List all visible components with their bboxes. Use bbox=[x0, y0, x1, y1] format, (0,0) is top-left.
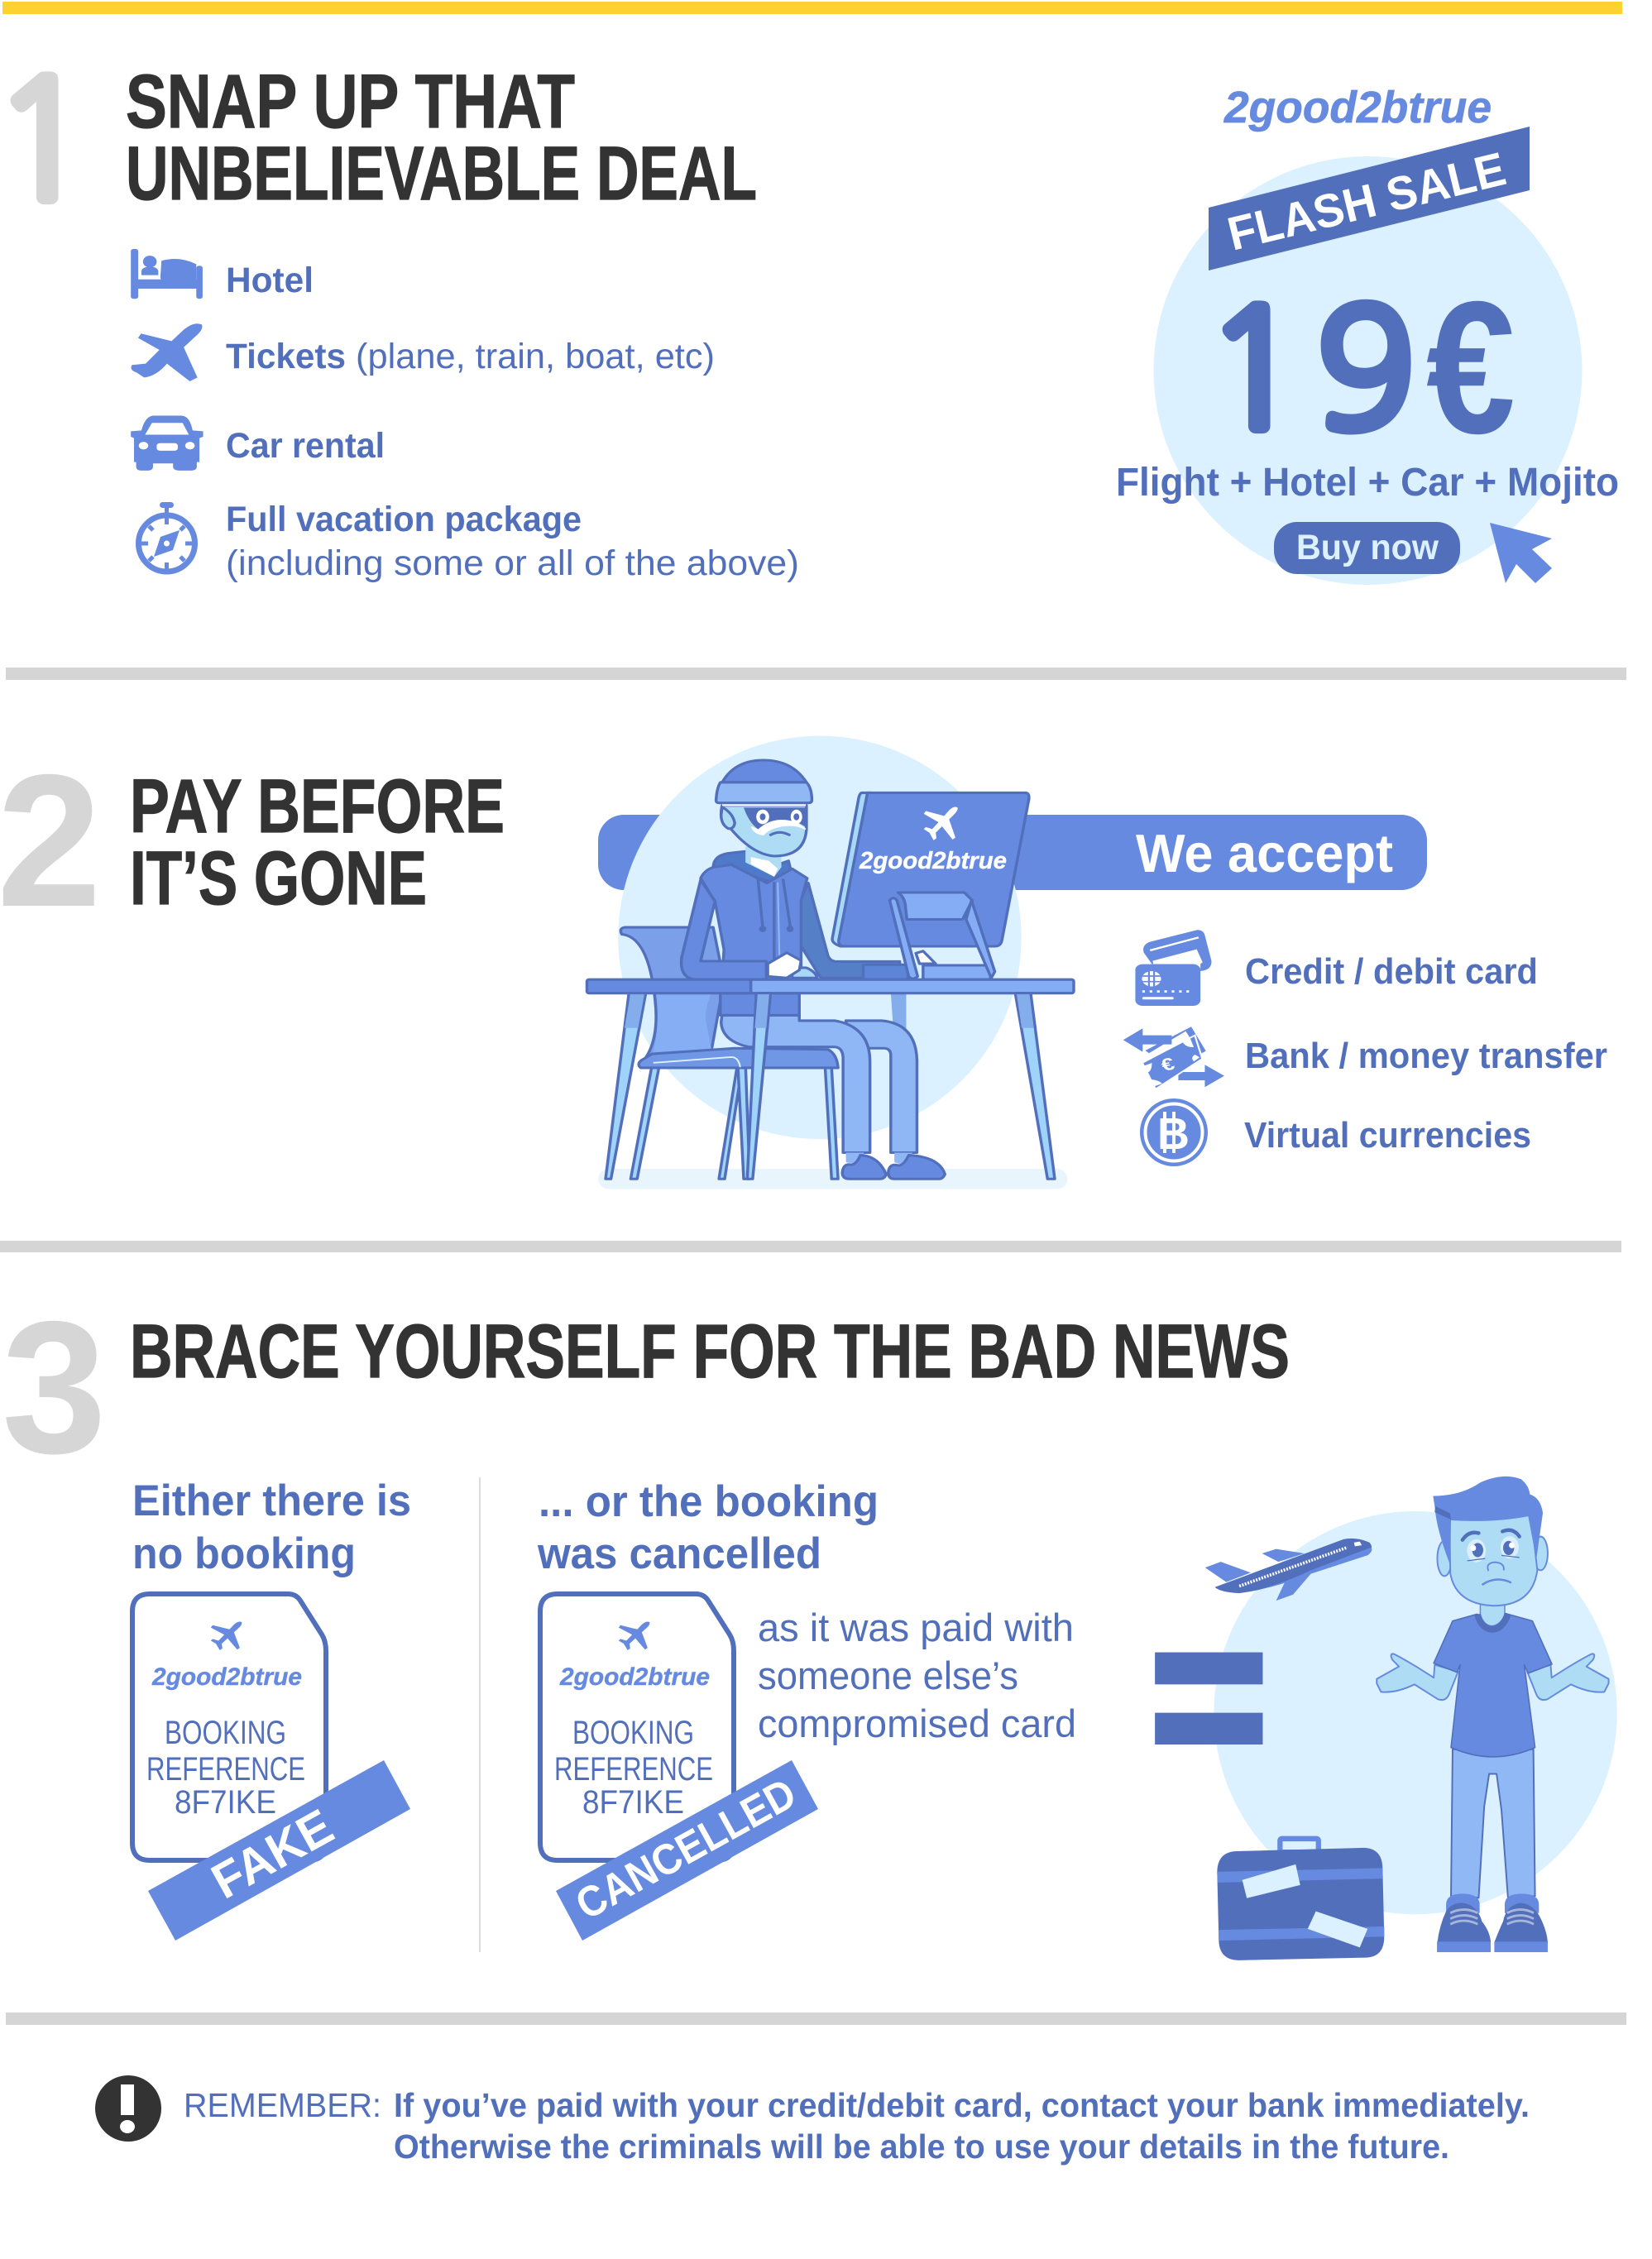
hood bbox=[713, 851, 791, 883]
reminder text bbox=[184, 2086, 1530, 2166]
panel: cancelled booking: REFERENCE bbox=[554, 1751, 713, 1788]
icon: exclamation mark bbox=[95, 2075, 161, 2142]
section 2 title: PAY BEFORE bbox=[130, 764, 505, 849]
desk bbox=[587, 979, 751, 993]
icon: plane bbox=[131, 323, 202, 381]
panel: fake booking: REFERENCE bbox=[146, 1751, 305, 1788]
panel: cancelled booking: 2good2btrue bbox=[559, 1663, 710, 1691]
suitcase bbox=[1217, 1839, 1384, 1960]
section 2 title: IT’S GONE bbox=[130, 836, 427, 921]
virtual currencies label: Virtual currencies bbox=[1244, 1115, 1531, 1156]
price: 19 bbox=[1204, 288, 1415, 452]
icon: cursor bbox=[1490, 523, 1552, 583]
back leg bbox=[846, 1021, 917, 1153]
brand name: 2good2btrue bbox=[1223, 83, 1492, 132]
illustration: stranded traveller bbox=[1155, 1476, 1617, 1960]
we accept banner: We accept bbox=[1136, 823, 1393, 883]
panel: fake booking: 2good2btrue bbox=[151, 1663, 302, 1691]
reminder text: Otherwise the criminals will be able to use your details in the future. bbox=[394, 2127, 1449, 2166]
airplane bbox=[1205, 1539, 1372, 1601]
heading: no booking: Either there is bbox=[132, 1476, 411, 1525]
price: € bbox=[1426, 261, 1516, 472]
section 1 title: SNAP UP THAT bbox=[126, 60, 575, 144]
panel: cancelled booking: 8F7IKE bbox=[582, 1784, 684, 1821]
man bbox=[1377, 1476, 1609, 1952]
heading: cancelled: ... or the booking bbox=[539, 1477, 879, 1526]
compromised card note: compromised card bbox=[758, 1701, 1076, 1745]
package text: Flight + Hotel + Car + Mojito bbox=[1116, 461, 1619, 505]
full vacation package label bbox=[226, 500, 799, 583]
icon: compass bbox=[139, 502, 195, 572]
hotel label: Hotel bbox=[226, 261, 314, 300]
heading: no booking: no booking bbox=[132, 1529, 356, 1578]
bank transfer label: Bank / money transfer bbox=[1245, 1036, 1607, 1076]
buy now button: Buy now bbox=[1296, 528, 1439, 567]
icon: car bbox=[131, 416, 204, 471]
reminder text: REMEMBER: bbox=[184, 2086, 381, 2124]
illustration: hacker at computer bbox=[587, 736, 1074, 1189]
monitor brand name: 2good2btrue bbox=[859, 848, 1007, 874]
icon: money transfer bbox=[1123, 1027, 1224, 1089]
buy now button bbox=[1274, 522, 1460, 574]
icon: hotel bed bbox=[131, 249, 203, 299]
heading: cancelled: was cancelled bbox=[537, 1529, 821, 1578]
head bbox=[721, 806, 807, 856]
tickets label: (plane, train, boat, etc) bbox=[356, 337, 715, 376]
torso bbox=[701, 864, 807, 979]
heading: no booking bbox=[132, 1476, 411, 1578]
heading: cancelled bbox=[537, 1477, 879, 1578]
section 2 title bbox=[130, 764, 505, 921]
section 3 number: 3 bbox=[2, 1283, 107, 1493]
compromised card note: someone else’s bbox=[758, 1654, 1018, 1697]
icon: bitcoin: B bbox=[1157, 1109, 1190, 1159]
hat bbox=[722, 760, 807, 783]
fake stamp bbox=[148, 1760, 410, 1941]
neck bbox=[745, 846, 782, 877]
icon: credit cards bbox=[1135, 930, 1211, 1006]
reminder text: If you’ve paid with your credit/debit card, contact your bank immediately. bbox=[394, 2086, 1530, 2124]
panel: flash sale ad bbox=[1116, 83, 1619, 585]
credit card label: Credit / debit card bbox=[1245, 951, 1538, 992]
full vacation package label: (including some or all of the above) bbox=[226, 543, 799, 583]
monitor bbox=[832, 792, 871, 946]
section 3 title: BRACE YOURSELF FOR THE BAD NEWS bbox=[130, 1309, 1290, 1394]
section 1 title: UNBELIEVABLE DEAL bbox=[126, 132, 757, 216]
icon: bitcoin bbox=[1140, 1098, 1208, 1166]
front arm bbox=[682, 880, 766, 979]
chair bbox=[620, 927, 724, 1065]
compromised card note bbox=[758, 1606, 1076, 1745]
we accept banner bbox=[598, 815, 1427, 890]
section 1 title bbox=[126, 60, 757, 216]
price bbox=[1204, 261, 1516, 472]
stand bbox=[898, 893, 972, 920]
flash sale banner: FLASH SALE bbox=[1223, 142, 1511, 261]
full vacation package label: Full vacation package bbox=[226, 500, 582, 539]
fake stamp: FAKE bbox=[203, 1798, 342, 1909]
panel: cancelled booking: BOOKING bbox=[572, 1715, 694, 1751]
panel: fake booking: 8F7IKE bbox=[175, 1784, 276, 1821]
hoodie hem bbox=[721, 993, 799, 1015]
hand and mouse bbox=[792, 968, 817, 978]
panel: fake booking bbox=[132, 1594, 410, 1941]
car rental label: Car rental bbox=[226, 426, 385, 466]
tickets label: Tickets bbox=[226, 337, 346, 376]
icon: money transfer: € bbox=[1159, 1055, 1178, 1075]
compromised card note: as it was paid with bbox=[758, 1606, 1074, 1649]
front leg bbox=[721, 1014, 870, 1153]
cancelled stamp: CANCELLED bbox=[568, 1769, 804, 1929]
drawstrings and zip bbox=[758, 880, 790, 978]
panel: cancelled booking bbox=[540, 1594, 818, 1941]
panel: fake booking: BOOKING bbox=[165, 1715, 286, 1751]
back arm bbox=[801, 883, 900, 978]
